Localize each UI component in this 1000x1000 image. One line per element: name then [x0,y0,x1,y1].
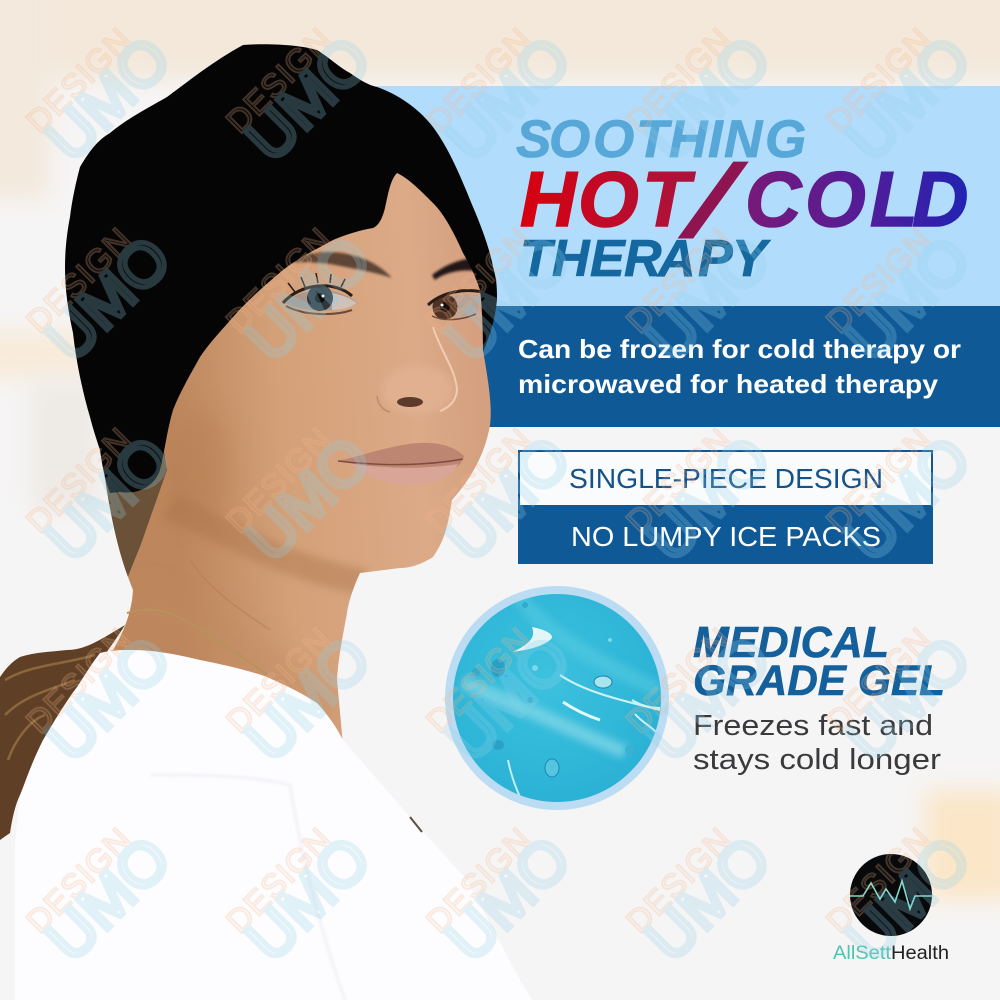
watermark: repeated Design UMO tiles: UMO [233,824,384,975]
watermark: repeated Design UMO tiles: DESIGN [819,220,939,340]
shirt folds [150,775,345,1000]
watermark: repeated Design UMO tiles: DESIGN [419,420,539,540]
watermark: repeated Design UMO tiles: UMO [433,224,584,375]
ponytail highlights [5,655,95,760]
watermark: repeated Design UMO tiles: UMO [233,424,384,575]
watermark: repeated Design UMO tiles: DESIGN [819,420,939,540]
watermark: repeated Design UMO tiles: UMO [833,624,984,775]
eyebrows [290,252,482,280]
watermark: repeated Design UMO tiles: DESIGN [219,820,339,940]
heading: medical grade gel: MEDICAL [693,618,889,667]
person: woman wearing cap [0,44,532,1000]
heading line: soothing: SOOTHING [516,110,806,169]
box: single-piece design [519,451,932,506]
panel: dark blue band [480,306,1000,427]
watermark: repeated Design UMO tiles: DESIGN [219,20,339,140]
watermark: repeated Design UMO tiles: DESIGN [19,20,139,140]
watermark: repeated Design UMO tiles: UMO [33,824,184,975]
shirt [15,650,532,1000]
lips [338,443,464,485]
watermark: repeated Design UMO tiles: DESIGN [819,20,939,140]
watermark: repeated Design UMO tiles: UMO [633,624,784,775]
watermark: repeated Design UMO tiles: UMO [633,424,784,575]
hair: ponytail [0,625,125,840]
heading: soothing hot/cold therapy [516,110,968,288]
watermark: repeated Design UMO tiles: DESIGN [619,20,739,140]
watermark: repeated Design UMO tiles: DESIGN [419,620,539,740]
watermark: repeated Design UMO tiles: UMO [833,224,984,375]
watermark: repeated Design UMO tiles: UMO [233,624,384,775]
watermark: repeated Design UMO tiles: UMO [833,824,984,975]
hair: strands below cap [100,440,172,577]
heading line: cold: COLD [745,155,968,243]
heading line: hot: HOT [520,155,696,243]
watermark: repeated Design UMO tiles: UMO [33,624,184,775]
box: no lumpy ice packs [518,505,933,564]
watermark: repeated Design UMO tiles: DESIGN [619,620,739,740]
watermark: repeated Design UMO tiles: UMO [633,224,784,375]
watermark: repeated Design UMO tiles: DESIGN [219,220,339,340]
text block: freezing and microwave copy: Can be frozen for cold therapy or [518,334,961,364]
watermark: repeated Design UMO tiles: UMO [633,24,784,175]
watermark: repeated Design UMO tiles: UMO [33,24,184,175]
eye: right [428,291,482,320]
heading line: therapy: THERAPY [520,230,771,288]
text block: freezes fast: Freezes fast and [693,710,933,742]
heading: medical grade gel [693,618,945,705]
text block: freezes fast: stays cold longer [693,744,941,776]
watermark: repeated Design UMO tiles: UMO [833,24,984,175]
watermark: repeated Design UMO tiles: UMO [433,824,584,975]
text block: freezing and microwave copy: microwaved for heated therapy [518,369,939,399]
eye: left [283,273,358,314]
watermark: repeated Design UMO tiles: DESIGN [19,620,139,740]
watermark: repeated Design UMO tiles: DESIGN [419,820,539,940]
watermark: repeated Design UMO tiles: UMO [433,624,584,775]
text block: freezing and microwave copy [518,334,961,399]
watermark: repeated Design UMO tiles: UMO [233,24,384,175]
watermark: repeated Design UMO tiles: DESIGN [619,220,739,340]
cap [65,44,497,493]
watermark: repeated Design UMO tiles: DESIGN [419,20,539,140]
watermark: repeated Design UMO tiles: UMO [433,24,584,175]
watermark: repeated Design UMO tiles: DESIGN [419,220,539,340]
skin shading [170,434,367,716]
nose [377,327,457,414]
watermark: repeated Design UMO tiles: DESIGN [19,220,139,340]
watermark: repeated Design UMO tiles: UMO [833,424,984,575]
logo: AllSettHealth: AllSettHealth [833,943,949,964]
box: single-piece design: SINGLE-PIECE DESIGN [569,463,883,494]
watermark: repeated Design UMO tiles: UMO [633,824,784,975]
necklace [127,610,268,675]
heading line: slash: / [675,149,749,254]
watermark: repeated Design UMO tiles: DESIGN [619,820,739,940]
watermark: repeated Design UMO tiles: DESIGN [619,420,739,540]
watermark: repeated Design UMO tiles: UMO [433,424,584,575]
watermark: repeated Design UMO tiles: UMO [33,224,184,375]
watermark: repeated Design UMO tiles: DESIGN [19,820,139,940]
watermark: repeated Design UMO tiles: DESIGN [19,420,139,540]
watermark: repeated Design UMO tiles: DESIGN [819,820,939,940]
logo: AllSettHealth [833,854,949,964]
panel: light blue header [375,86,1000,306]
watermark: repeated Design UMO tiles: DESIGN [219,420,339,540]
heading: medical grade gel: GRADE GEL [693,657,945,705]
icon: gel texture circle [445,586,669,815]
watermark: repeated Design UMO tiles: UMO [233,224,384,375]
text block: freezes fast [693,710,941,776]
watermark: repeated Design UMO tiles: UMO [33,424,184,575]
watermark: repeated Design UMO tiles: DESIGN [219,620,339,740]
skin: face and neck [100,150,497,745]
watermark: repeated Design UMO tiles: DESIGN [819,620,939,740]
box: no lumpy ice packs: NO LUMPY ICE PACKS [571,521,881,552]
